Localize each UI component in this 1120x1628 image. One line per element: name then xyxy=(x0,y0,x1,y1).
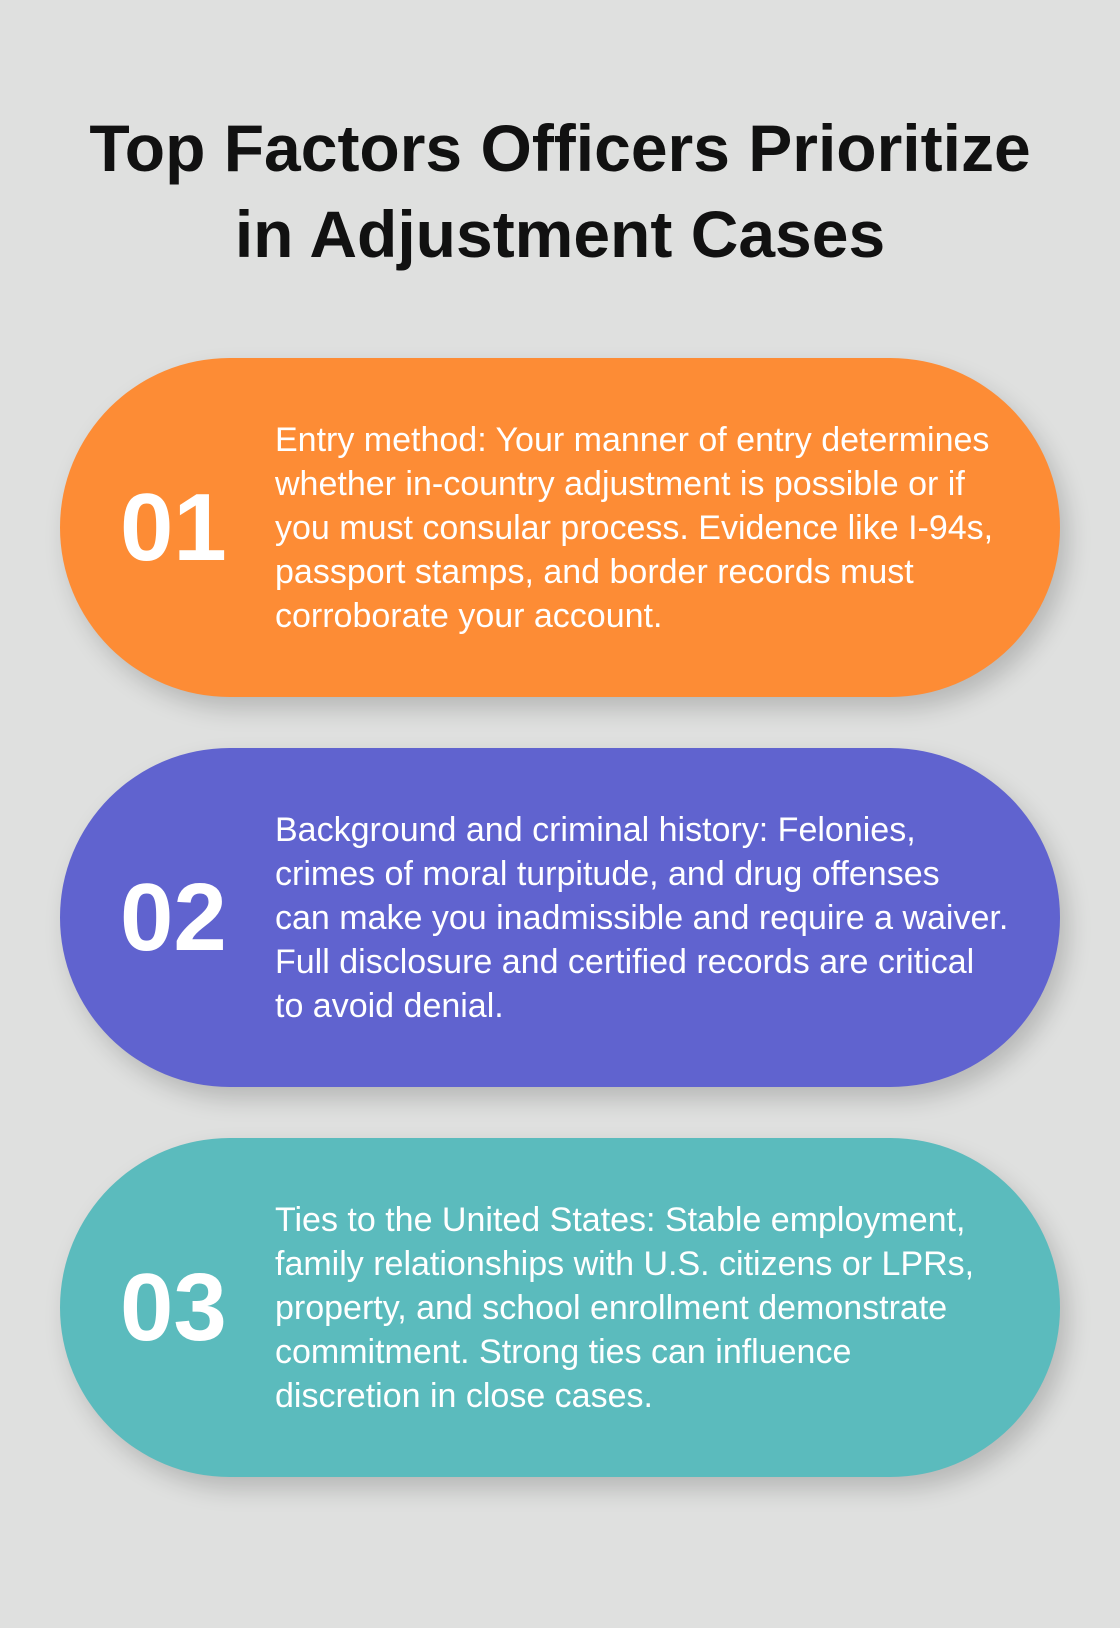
text: ties: discretion in close cases. xyxy=(275,1376,653,1414)
text: background: can make you inadmissible and require a waiver. xyxy=(275,898,1008,936)
text: entry method xyxy=(275,420,993,634)
text: ties: family relationships with U.S. citizens or LPRs, xyxy=(275,1244,974,1282)
text: entry method: corroborate your account. xyxy=(275,596,662,634)
text: ties: Ties to the United States: Stable employment, xyxy=(275,1200,965,1238)
number 02: 02 xyxy=(120,864,227,971)
panel: 03 ties xyxy=(60,1138,1060,1477)
number 03: 03 xyxy=(120,1254,227,1361)
text: background: Background and criminal history: Felonies, xyxy=(275,810,916,848)
panel: 02 background xyxy=(60,748,1060,1087)
title: in Adjustment Cases xyxy=(235,197,885,271)
number 01: 01 xyxy=(120,474,227,581)
text: background: crimes of moral turpitude, and drug offenses xyxy=(275,854,940,892)
title xyxy=(89,111,1031,271)
text: entry method: whether in-country adjustment is possible or if xyxy=(275,464,965,502)
text: entry method: Entry method: Your manner of entry determines xyxy=(275,420,989,458)
text: entry method: you must consular process. Evidence like I-94s, xyxy=(275,508,993,546)
text: entry method: passport stamps, and border records must xyxy=(275,552,914,590)
text: ties xyxy=(275,1200,974,1414)
text: ties: property, and school enrollment demonstrate xyxy=(275,1288,947,1326)
title: Top Factors Officers Prioritize xyxy=(89,111,1031,185)
text: background xyxy=(275,810,1008,1024)
text: ties: commitment. Strong ties can influence xyxy=(275,1332,851,1370)
text: background: Full disclosure and certified records are critical xyxy=(275,942,974,980)
panel: 01 entry method xyxy=(60,358,1060,697)
text: background: to avoid denial. xyxy=(275,986,504,1024)
